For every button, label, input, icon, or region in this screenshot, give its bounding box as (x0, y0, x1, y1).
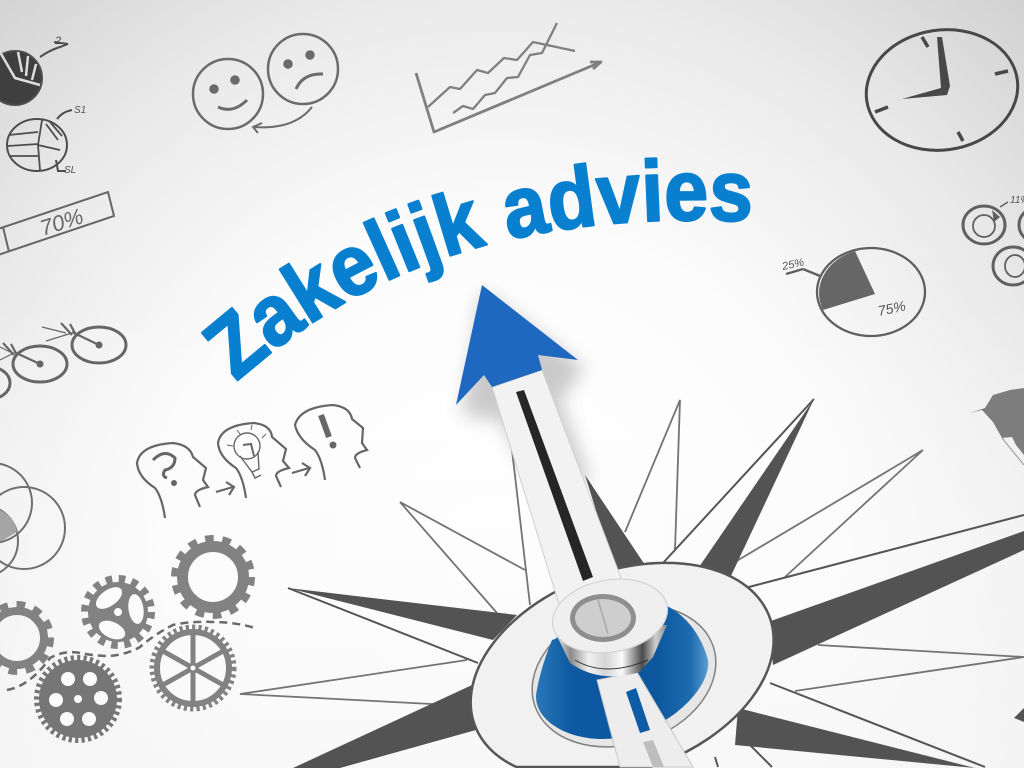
icon: pie chart 75%: 25% (780, 257, 805, 273)
icon: smiley faces (193, 34, 338, 133)
icon: gears (0, 539, 255, 740)
gear with round holes (37, 658, 119, 740)
dark compass outlines (288, 399, 1024, 767)
icon: world map (970, 388, 1024, 465)
compass centre disc (471, 563, 774, 767)
icon: target arrows (0, 323, 126, 399)
needle upper shaft (492, 370, 637, 640)
head with question mark (137, 443, 208, 518)
needle shadow (462, 290, 590, 500)
gear left (0, 605, 50, 671)
title: Zakelijk advies (200, 157, 750, 382)
line chart (416, 23, 601, 132)
needle slots (516, 390, 593, 581)
thin compass points (240, 400, 1024, 706)
compass needle and hub (456, 285, 734, 768)
gear with oval holes (85, 579, 151, 645)
compass rose (240, 399, 1024, 768)
needle lower shaft (597, 672, 693, 767)
icon: pie charts top left (0, 35, 86, 176)
progress bar 70% (0, 192, 114, 256)
gear top (175, 539, 251, 615)
icon: venn diagram (0, 463, 65, 577)
hub blue base (514, 582, 734, 768)
icon: donut charts right (963, 195, 1024, 285)
icon: pie chart 75% (780, 248, 925, 336)
head with exclamation mark (295, 405, 367, 480)
icon: pie charts top left: S1 (74, 105, 86, 116)
progress bar 70%: 70% (37, 203, 86, 241)
icon: pie charts top left: 2 (54, 35, 61, 47)
icon: pie charts top left: SL (64, 165, 76, 176)
gear with spokes (152, 627, 234, 709)
metal cap (547, 570, 673, 676)
arrow (216, 482, 234, 495)
arrow (292, 463, 310, 476)
dashed path through gears (7, 622, 255, 690)
icon: thinking heads (137, 405, 367, 518)
dark compass points (288, 399, 1024, 768)
icon: clock (858, 20, 1024, 160)
arrow head (456, 285, 578, 405)
head with light bulb (218, 423, 289, 498)
icon: pie chart 75%: 75% (876, 297, 907, 319)
